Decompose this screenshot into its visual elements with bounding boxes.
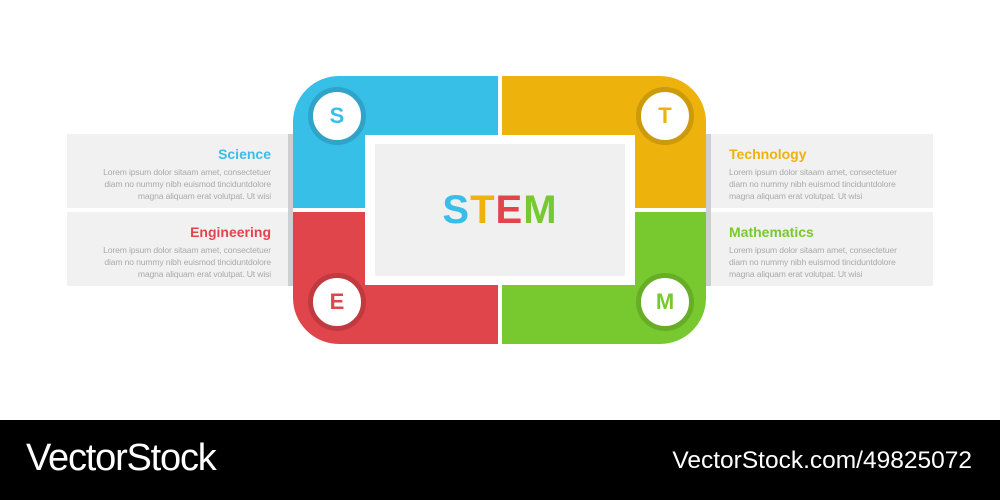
panel: science text: magna aliquam erat volutpat. Ut wisi bbox=[138, 191, 271, 201]
panel: mathematics text: Mathematics bbox=[729, 224, 814, 240]
footer url: VectorStock.com/49825072 bbox=[672, 447, 972, 474]
icon: M circle: M bbox=[656, 289, 674, 314]
panel: technology text: magna aliquam erat volutpat. Ut wisi bbox=[729, 191, 862, 201]
panel: mathematics text bbox=[707, 212, 933, 286]
icon: S circle: S bbox=[330, 103, 344, 128]
footer bar bbox=[0, 420, 1000, 500]
center box: STEM bbox=[442, 188, 558, 232]
panel: science text: Science bbox=[218, 146, 271, 162]
quadrant: science blue bbox=[293, 76, 498, 208]
panel: technology text bbox=[707, 134, 933, 208]
quadrant: technology yellow bbox=[502, 76, 706, 208]
panel: mathematics text: Lorem ipsum dolor sitaam amet, consectetuer bbox=[729, 245, 897, 255]
quadrant: engineering red bbox=[293, 212, 498, 344]
shading strips bbox=[288, 134, 293, 286]
quadrant: mathematics green bbox=[502, 212, 706, 344]
icon: S circle bbox=[308, 87, 366, 145]
icon: E circle bbox=[308, 273, 366, 331]
panel: engineering text: diam no nummy nibh euismod tinciduntdolore bbox=[104, 257, 271, 267]
panel: technology text: Lorem ipsum dolor sitaam amet, consectetuer bbox=[729, 167, 897, 177]
panel: science text: diam no nummy nibh euismod tinciduntdolore bbox=[104, 179, 271, 189]
panel: science text bbox=[67, 134, 293, 208]
icon: M circle bbox=[636, 273, 694, 331]
icon: T circle: T bbox=[658, 103, 672, 128]
panel: mathematics text: magna aliquam erat volutpat. Ut wisi bbox=[729, 269, 862, 279]
panel: mathematics text: diam no nummy nibh euismod tinciduntdolore bbox=[729, 257, 896, 267]
panel: technology text: diam no nummy nibh euismod tinciduntdolore bbox=[729, 179, 896, 189]
panel: engineering text: Lorem ipsum dolor sitaam amet, consectetuer bbox=[103, 245, 271, 255]
icon: E circle: E bbox=[330, 289, 344, 314]
panel: engineering text: Engineering bbox=[190, 224, 271, 240]
icon: T circle bbox=[636, 87, 694, 145]
footer logo: VectorStock bbox=[26, 437, 216, 479]
panel: technology text: Technology bbox=[729, 146, 807, 162]
panel: science text: Lorem ipsum dolor sitaam amet, consectetuer bbox=[103, 167, 271, 177]
panel: engineering text bbox=[67, 212, 293, 286]
panel: engineering text: magna aliquam erat volutpat. Ut wisi bbox=[138, 269, 271, 279]
center box bbox=[365, 135, 635, 285]
